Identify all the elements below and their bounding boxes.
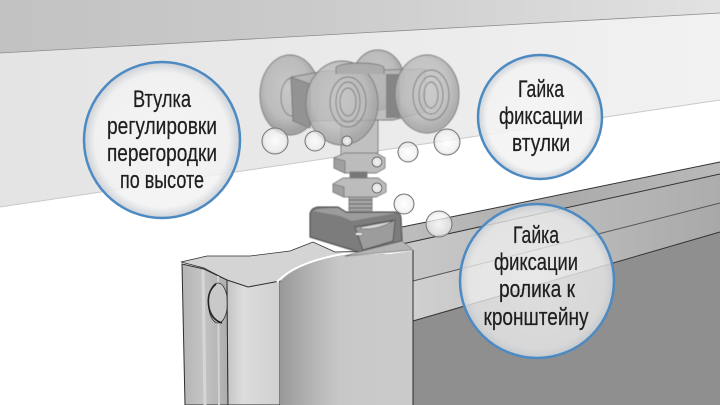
callout: sleeve lock nut: втулки <box>512 130 570 157</box>
callout: sleeve lock nut: фиксации <box>499 103 583 130</box>
callout: sleeve height adjustment: регулировки <box>107 113 217 140</box>
bubble: clamp small <box>394 194 414 214</box>
roller: left <box>260 55 320 135</box>
bubble: stem hole <box>342 136 352 146</box>
callout: roller-to-bracket lock nut <box>460 204 614 358</box>
outer post <box>227 280 280 405</box>
callout: sleeve lock nut: Гайка <box>518 76 564 103</box>
callout: roller-to-bracket lock nut: фиксации <box>494 249 578 276</box>
roller: centre <box>306 61 378 145</box>
callout: sleeve height adjustment: Втулка <box>133 86 191 113</box>
top collar <box>336 63 384 74</box>
roller: rear <box>352 50 404 110</box>
bubble: right small <box>398 142 418 162</box>
partition profile <box>181 242 413 405</box>
left channel <box>182 264 228 405</box>
bubble: lower nut hole <box>372 183 382 193</box>
callout: sleeve height adjustment <box>84 62 240 218</box>
upper nut <box>334 153 385 173</box>
bubble: left large <box>262 128 288 154</box>
profile top opening <box>181 242 413 287</box>
clamp bracket <box>310 207 413 256</box>
callout: sleeve lock nut <box>478 55 602 179</box>
callout: roller-to-bracket lock nut: ролика к <box>499 276 575 303</box>
callout: roller-to-bracket lock nut: Гайка <box>513 222 559 249</box>
threaded rod <box>349 172 372 211</box>
bubble: upper nut hole <box>372 157 382 167</box>
marker bubbles <box>262 128 460 237</box>
mounting hole <box>208 283 228 323</box>
bubble: right large <box>434 129 460 155</box>
roller: right <box>395 55 459 133</box>
front curved face <box>277 250 413 405</box>
bracket body <box>291 69 425 128</box>
callout: sleeve height adjustment: перегородки <box>107 140 217 167</box>
callout: sleeve height adjustment: по высоте <box>120 167 204 194</box>
lower nut <box>333 178 386 197</box>
bubble: left small <box>305 131 325 151</box>
roller assembly <box>260 50 459 211</box>
callout: roller-to-bracket lock nut: кронштейну <box>484 304 588 331</box>
bubble: clamp large <box>426 211 452 237</box>
stem <box>341 120 378 155</box>
